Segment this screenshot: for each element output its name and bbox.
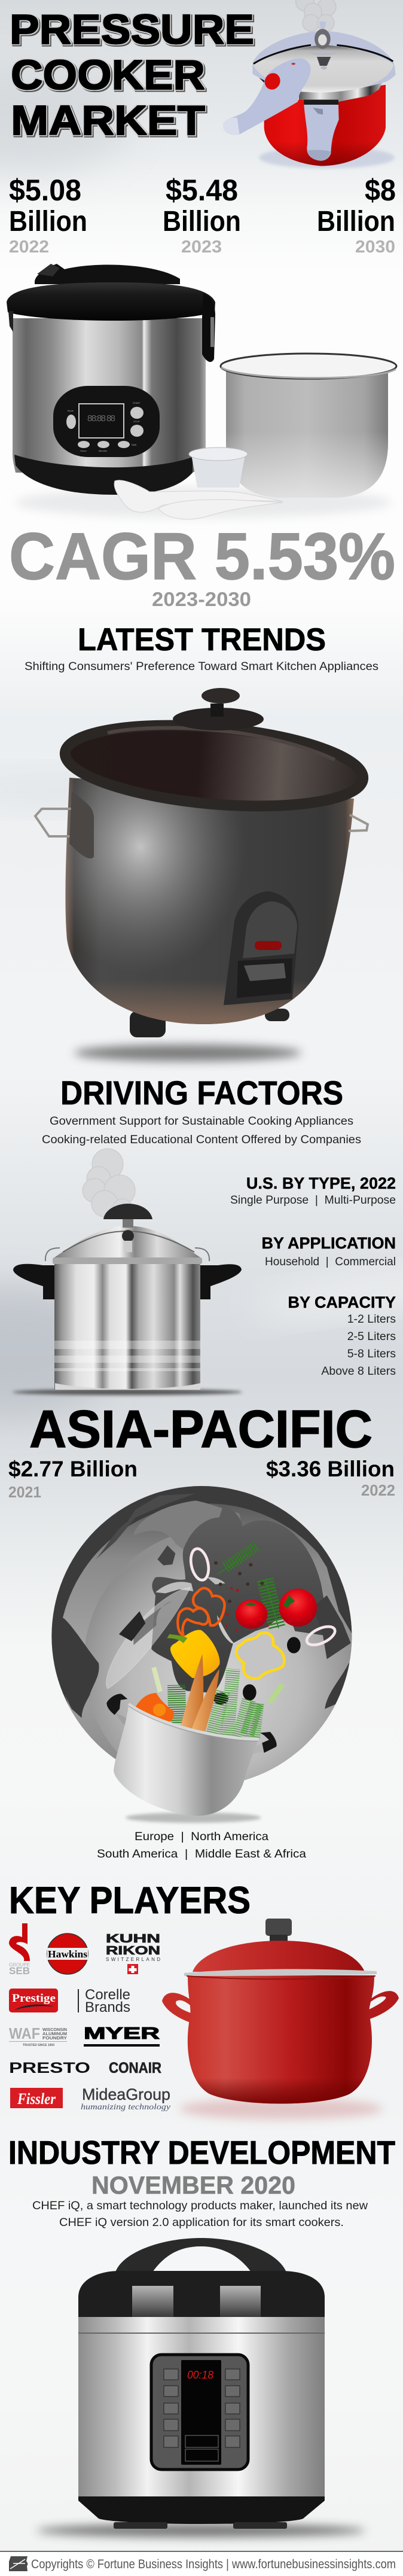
logo: Conair: CONAIR (109, 2060, 161, 2076)
stat: Asia-Pacific 2022 (266, 1457, 395, 1499)
stat: 2023 market size (163, 173, 241, 257)
Eurasia and Africa (151, 1506, 326, 1693)
logo: Midea Group: MideaGroup (82, 2085, 170, 2103)
illustration: red pressure cooker with steam (223, 0, 396, 169)
stat: 2023 market size: Billion (163, 206, 241, 237)
footer bar (0, 2551, 403, 2576)
handles (13, 1264, 242, 1299)
logo: Wisconsin Aluminum Foundry: TRUSTED SINCE 1900 (23, 2044, 54, 2047)
logo: Kuhn Rikon: RIKON (106, 1944, 160, 1957)
stat: Asia-Pacific 2021: 2021 (8, 1483, 41, 1501)
globe (51, 1486, 356, 1801)
peppercorns (214, 1561, 269, 1631)
segment: by capacity: 2-5 Liters (347, 1330, 396, 1343)
illustration: digital rice cooker with inner pot (7, 264, 396, 519)
stat: 2022 market size: 2022 (9, 237, 49, 257)
illustration: globe with cooking pot and vegetables (51, 1486, 356, 1823)
title: PRESSURE (10, 6, 254, 53)
control panel: Minutes (99, 449, 107, 452)
logo: Wisconsin Aluminum Foundry (9, 2024, 67, 2047)
text: other regions (97, 1830, 306, 1861)
switch housing (224, 891, 298, 1005)
title (10, 6, 254, 144)
left handle (35, 791, 94, 858)
segment: by capacity: BY CAPACITY (288, 1293, 396, 1311)
heading: key players: KEY PLAYERS (9, 1880, 251, 1922)
stat: 2030 market size (317, 173, 396, 257)
logo: Presto: PRESTO (9, 2060, 90, 2076)
segment: U.S. by type: U.S. BY TYPE, 2022 (246, 1174, 396, 1192)
illustration: smart electric cooker (36, 2238, 365, 2537)
heading: driving factors: DRIVING FACTORS (60, 1074, 343, 1112)
stat: 2030 market size: 2030 (355, 237, 395, 257)
glass lid (106, 1587, 190, 1689)
text: driving factors list: Cooking-related Educational Content Offered by Companies (42, 1133, 361, 1146)
text: driving factors list (42, 1115, 361, 1146)
segment: by application: Household | Commercial (265, 1255, 396, 1268)
measuring cup (189, 447, 248, 488)
CAGR figure: CAGR 5.53% (9, 520, 395, 593)
stat: 2030 market size: $8 (365, 173, 396, 207)
yellow pepper ring (236, 1633, 284, 1679)
control panel: 00:18 (187, 2369, 213, 2381)
stat: 2023 market size: 2023 (181, 237, 222, 257)
segment: by capacity: 5-8 Liters (347, 1347, 396, 1360)
right handle (349, 815, 368, 831)
stat: Asia-Pacific 2022: $3.36 Billion (266, 1457, 395, 1481)
logo: Myer (84, 2024, 160, 2047)
logo: Groupe SEB (9, 1923, 30, 1977)
herb sprig upper (217, 1546, 256, 1575)
stat: 2022 market size (9, 173, 87, 257)
logo: Wisconsin Aluminum Foundry: WISCONSIN (42, 2028, 67, 2032)
logo: Wisconsin Aluminum Foundry: FOUNDRY (42, 2036, 67, 2041)
text: other regions: Europe | North America (135, 1830, 268, 1843)
logo: Myer: MYER (84, 2024, 160, 2042)
control panel: TIME (131, 443, 137, 446)
stat: 2022 market size: $5.08 (9, 173, 81, 207)
segment list (230, 1174, 396, 1378)
logo: Kuhn Rikon: KUHN (106, 1932, 160, 1945)
yellow pepper (167, 1630, 220, 1678)
segment: U.S. by type (230, 1174, 396, 1207)
segment: by capacity: 1-2 Liters (347, 1313, 396, 1326)
logo: Hawkins: Hawkins (48, 1948, 87, 1960)
stat: Asia-Pacific 2021 (8, 1457, 138, 1501)
segment: by application: BY APPLICATION (261, 1234, 396, 1252)
text: development description: CHEF iQ version 2.0 application for its smart cookers. (59, 2216, 344, 2229)
control panel: STOP (133, 420, 140, 423)
control panel: Mode (68, 409, 74, 412)
the Americas (59, 1618, 99, 1718)
logo: Kuhn Rikon: SWITZERLAND (106, 1957, 160, 1962)
control panel (151, 2355, 248, 2470)
icon: steam (296, 0, 336, 31)
onion rings (188, 1547, 338, 1649)
title: COOKER (11, 51, 205, 98)
stat: Asia-Pacific 2022: 2022 (361, 1481, 395, 1499)
Australia and islands (325, 1663, 349, 1709)
orange pepper rings (178, 1588, 225, 1635)
text: development description: CHEF iQ, a smart technology products maker, launched its new (32, 2199, 368, 2212)
stat: Asia-Pacific 2021: $2.77 Billion (8, 1457, 138, 1481)
herb sprig behind tomatoes (265, 1579, 279, 1628)
logo: Corelle Brands: Brands (85, 1999, 130, 2015)
stat: 2022 market size: Billion (9, 206, 87, 237)
logo: Corelle Brands: Corelle (85, 1987, 130, 2003)
segment: U.S. by type: Single Purpose | Multi-Purpose (230, 1193, 396, 1207)
text: driving factors list: Government Support for Sustainable Cooking Appliances (50, 1115, 353, 1128)
steel cooking pot (106, 1694, 277, 1823)
illustration: dark rice cooker (35, 688, 368, 1061)
date: November 2020: NOVEMBER 2020 (91, 2171, 295, 2199)
heading: latest trends: LATEST TRENDS (78, 622, 326, 657)
logo: Hawkins (47, 1933, 88, 1974)
text: other regions: South America | Middle East & Africa (97, 1847, 306, 1861)
logo: Groupe SEB: SEB (9, 1965, 30, 1977)
black olives (213, 1637, 301, 1704)
segment: by application (261, 1234, 396, 1268)
control panel: Hours (80, 449, 87, 452)
control panel: START (133, 401, 141, 404)
title: MARKET (11, 97, 205, 144)
logo: Fissler: Fissler (17, 2090, 56, 2108)
heading: Asia-Pacific: ASIA-PACIFIC (29, 1399, 373, 1458)
logo: Midea Group (81, 2085, 171, 2112)
stat: 2023 market size: $5.48 (166, 173, 238, 207)
control panel (53, 386, 160, 457)
logo: Prestige (9, 1989, 58, 2012)
spring onion pieces (151, 1667, 285, 1703)
tomatoes (236, 1589, 317, 1629)
icon: steam (83, 1149, 135, 1218)
inner pot (221, 354, 396, 498)
logo: Kuhn Rikon (106, 1932, 160, 1974)
segment: by capacity (288, 1293, 396, 1378)
control panel: 88:88 88 (87, 413, 115, 424)
CAGR figure: 2023-2030 (152, 588, 251, 610)
logo: Midea Group: humanizing technology (81, 2103, 171, 2112)
icon: Fortune Business Insights logo (9, 2556, 28, 2571)
pressure valve (309, 22, 337, 69)
text: development description (32, 2199, 368, 2229)
text: trend description: Shifting Consumers' Preference Toward Smart Kitchen Appliances (25, 660, 378, 673)
arctic land (133, 1500, 242, 1549)
logo: Groupe SEB: GROUPE (9, 1962, 30, 1968)
illustration: stainless pressure cooker (13, 1149, 242, 1395)
illustration: red enamel pot (162, 1919, 399, 2120)
logo: Corelle Brands (78, 1987, 130, 2015)
segment: by capacity: Above 8 Liters (321, 1365, 396, 1378)
pot contents: greens, pepper, carrots (135, 1654, 257, 1737)
logo: Prestige: Prestige (12, 1992, 56, 2005)
rice spoons (114, 480, 283, 519)
company logos (9, 1923, 171, 2112)
logo: Wisconsin Aluminum Foundry: ALUMINUM (42, 2032, 67, 2036)
stat: 2030 market size: Billion (317, 206, 395, 237)
logo: Wisconsin Aluminum Foundry: WAF (9, 2024, 40, 2042)
